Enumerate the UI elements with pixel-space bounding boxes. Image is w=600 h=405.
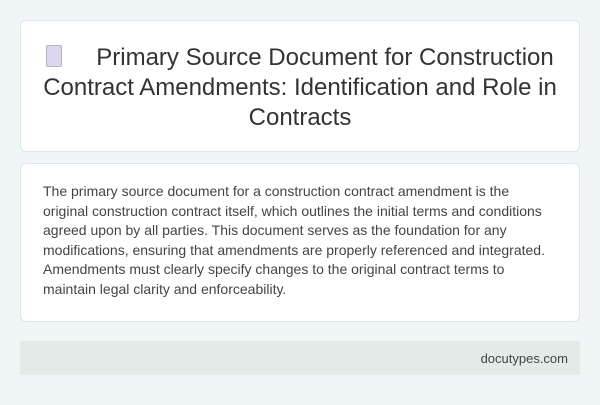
title: Primary Source Document for Construction Contract Amendments: Identification and Role in Contracts xyxy=(43,44,557,131)
panel: title card xyxy=(20,20,580,152)
text block: description: The primary source document for a construction contract amendment is the original construction contract itself, which outlines the initial terms and conditions agreed upon by all parties. This document serves as the foundation for any modifications, ensuring that amendments are properly referenced and integrated. Amendments must clearly specify changes to the original contract terms to maintain legal clarity and enforceability. xyxy=(43,183,545,296)
icon: document xyxy=(46,45,62,67)
panel: description card xyxy=(20,163,580,322)
footer text: source: docutypes.com xyxy=(481,351,568,366)
footer bar xyxy=(20,341,580,375)
